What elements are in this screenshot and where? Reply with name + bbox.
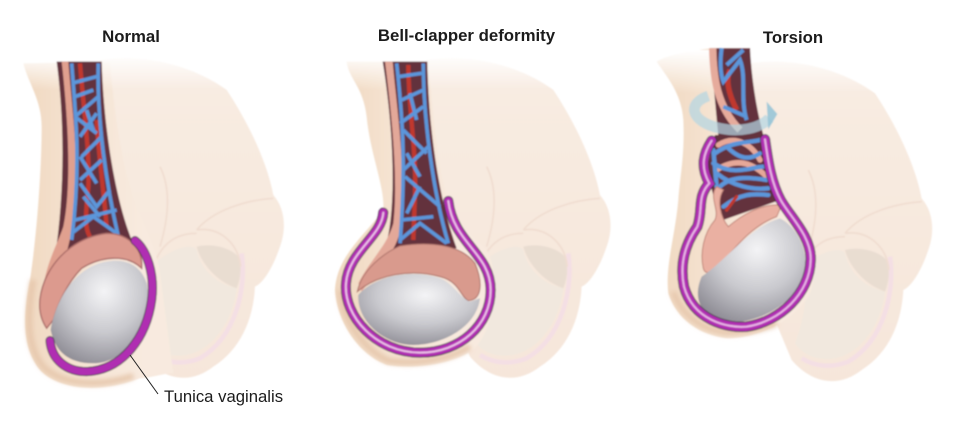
- spermatic cord: normal: [50, 62, 132, 287]
- cord contents above the twist: [713, 48, 747, 130]
- skin edge shading: torsion: [673, 292, 777, 333]
- rear anatomy: torsion: [748, 62, 932, 381]
- veins and arteries: normal: [72, 63, 118, 240]
- leader line: [130, 355, 158, 394]
- spermatic cord: bell-clapper: [383, 62, 457, 253]
- skin edge shading: normal: [29, 280, 133, 383]
- tunica vaginalis: torsion: [682, 139, 811, 327]
- skin edge shading: bell-clapper: [341, 290, 470, 362]
- testis: torsion: [698, 218, 806, 323]
- epididymis: torsion: [702, 187, 782, 273]
- rear anatomy: bell-clapper: [427, 58, 611, 378]
- callout: Tunica vaginalis: [130, 355, 283, 406]
- panel: normal anatomy: [0, 53, 300, 388]
- top fade: torsion: [640, 50, 940, 93]
- panel: bell-clapper deformity: [320, 53, 620, 378]
- veins and arteries: bell-clapper: [397, 63, 448, 243]
- panel: torsion: [640, 48, 940, 381]
- scrotal skin: normal: [23, 62, 173, 388]
- title: Bell-clapper deformity: Bell-clapper deformity: [378, 26, 556, 45]
- spermatic cord: torsion: [710, 48, 763, 135]
- scrotal skin: torsion: [657, 48, 814, 338]
- epididymis: bell-clapper: [357, 244, 480, 301]
- top fade: normal: [0, 53, 300, 90]
- title: Normal: Normal: [102, 27, 160, 46]
- twisted veins: [713, 140, 768, 210]
- vas deferens: normal: [42, 62, 76, 325]
- label text: Tunica vaginalis: [164, 387, 283, 406]
- vas deferens: bell-clapper: [358, 62, 402, 292]
- scrotal skin: bell-clapper: [335, 62, 494, 367]
- rear anatomy: normal: [100, 58, 284, 378]
- top fade: bell-clapper: [320, 53, 620, 90]
- title: Torsion: Torsion: [763, 28, 823, 47]
- arrow: twist direction: [694, 96, 777, 130]
- tunica vaginalis: bell-clapper: [346, 201, 491, 353]
- testis: normal: [51, 261, 148, 363]
- tunica vaginalis: normal: [50, 241, 152, 372]
- epididymis: normal: [40, 233, 142, 328]
- testis: bell-clapper: [358, 274, 480, 345]
- twisted cord: [708, 135, 780, 220]
